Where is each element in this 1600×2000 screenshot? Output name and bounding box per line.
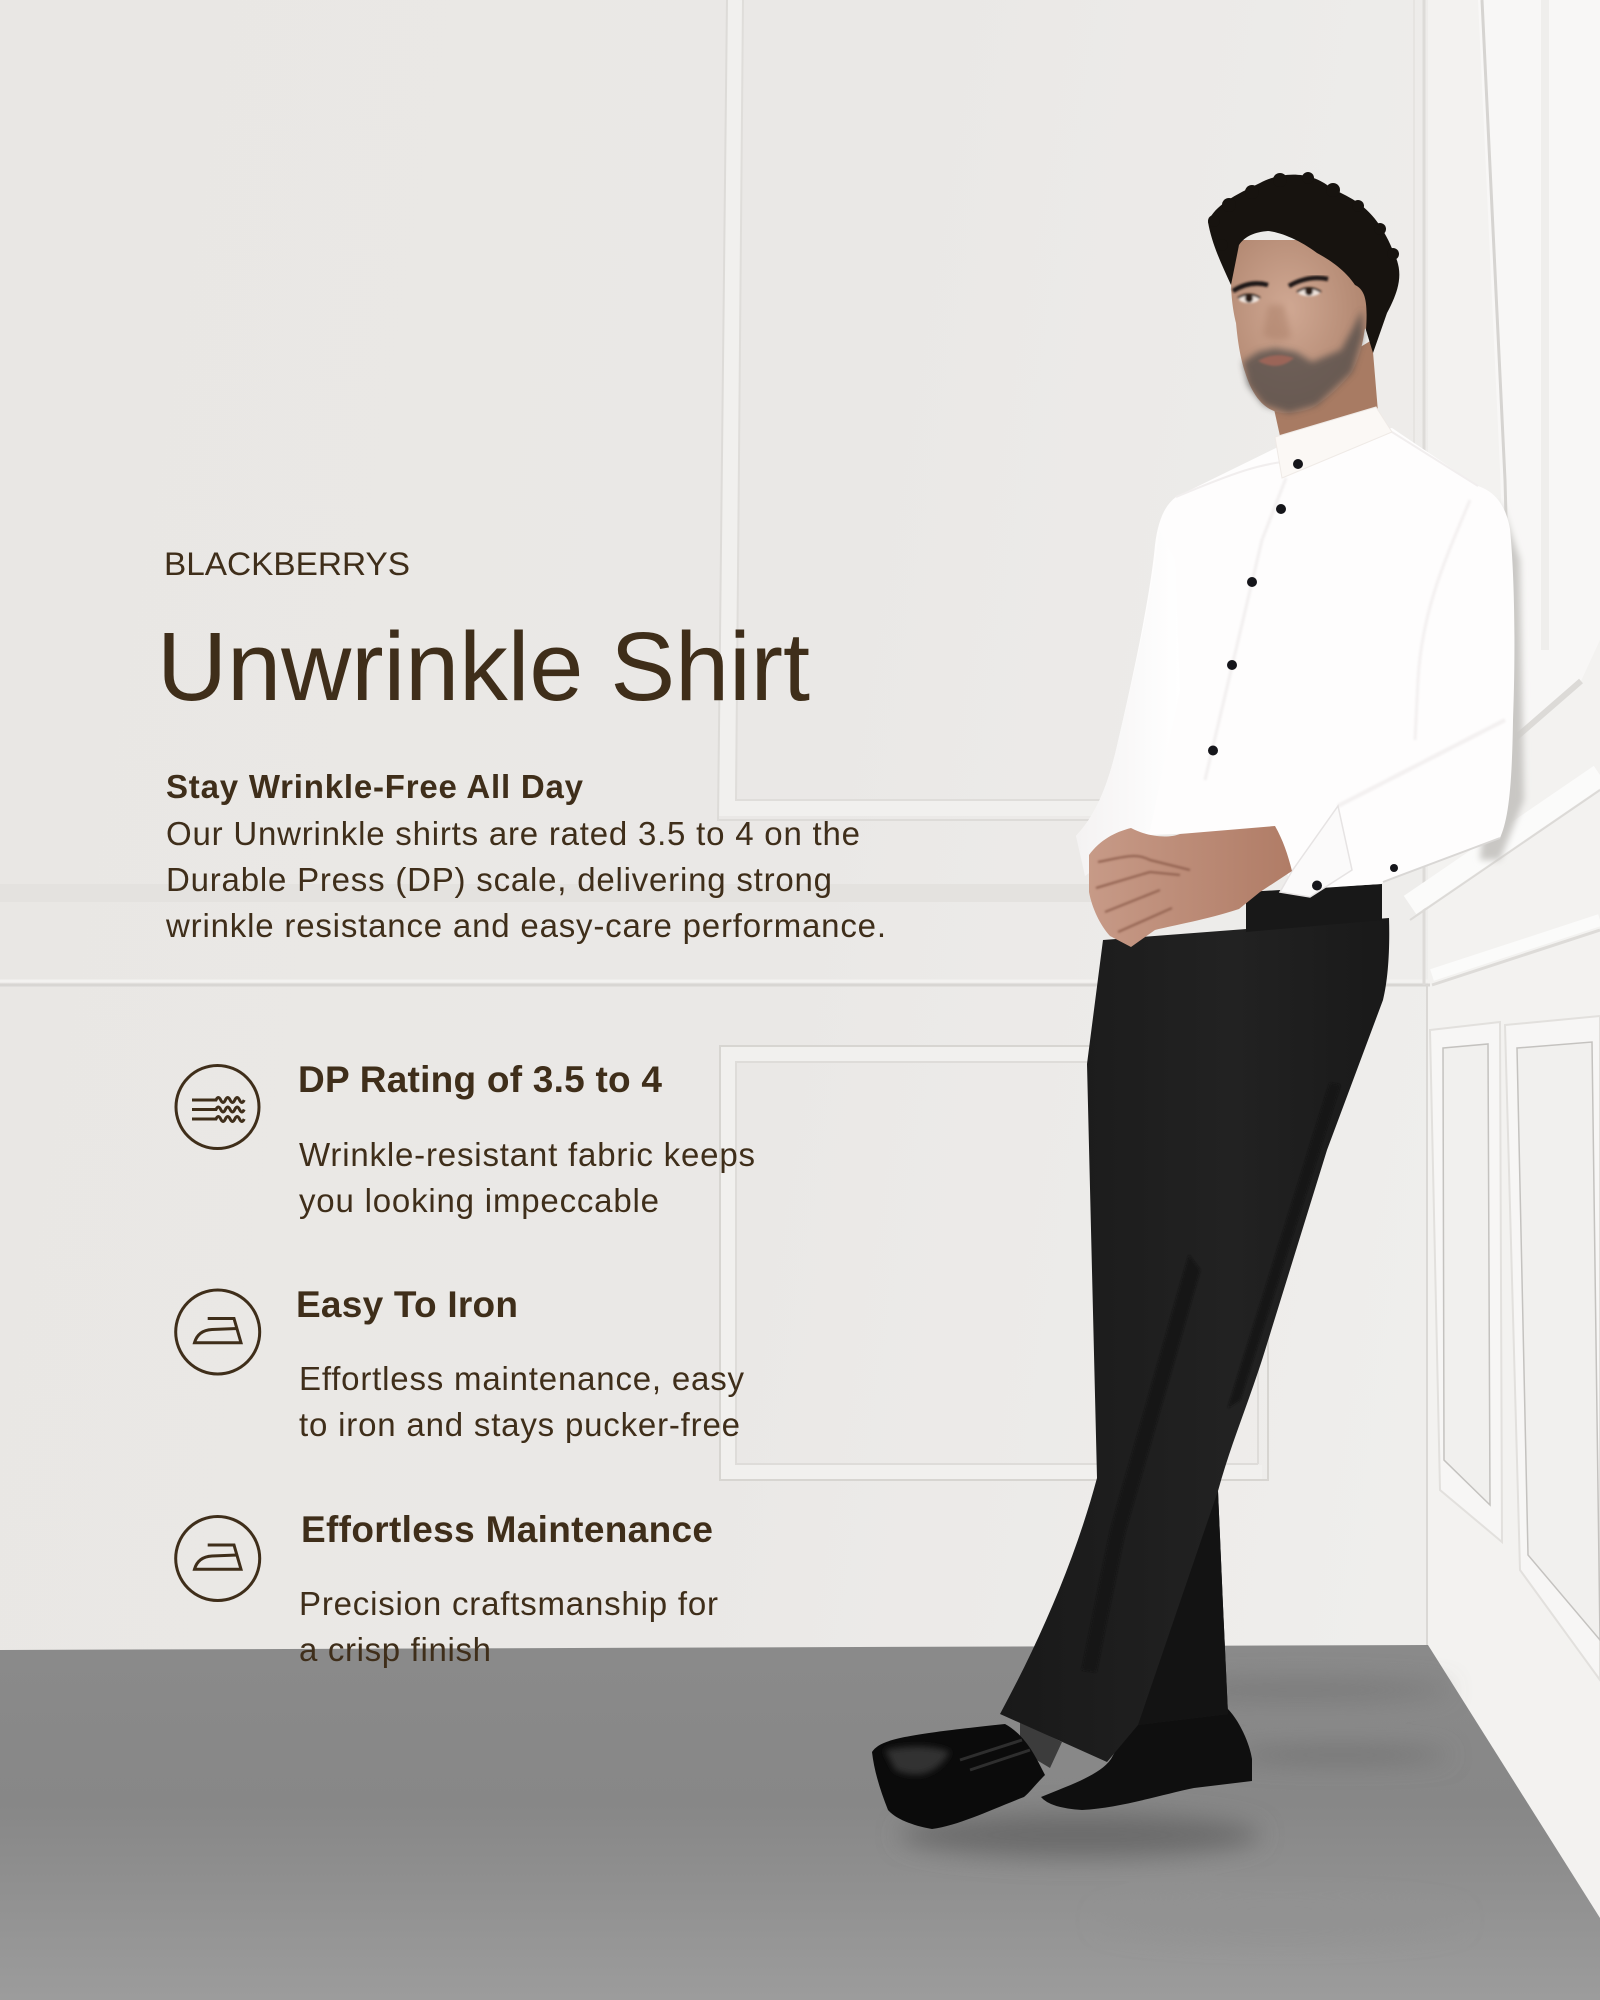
description: Wrinkle-resistant fabric keeps (299, 1136, 755, 1173)
ear (1360, 283, 1384, 333)
intro heading: Stay Wrinkle-Free All Day (166, 768, 584, 805)
description (299, 1360, 744, 1443)
nose (1263, 305, 1291, 341)
description (299, 1136, 755, 1219)
description: you looking impeccable (299, 1182, 659, 1219)
hair (1208, 172, 1399, 353)
description: to iron and stays pucker-free (299, 1406, 740, 1443)
description (299, 1585, 718, 1668)
feature: easy to iron (176, 1284, 744, 1443)
title: Unwrinkle Shirt (157, 612, 810, 721)
neck (1272, 340, 1378, 445)
brows (1233, 278, 1328, 291)
hands (1089, 826, 1292, 947)
person: man in white shirt and black trousers (872, 172, 1524, 1829)
trousers (1000, 918, 1389, 1762)
intro line 1: Our Unwrinkle shirts are rated 3.5 to 4 on the (166, 815, 860, 852)
icon: fabric waves in circle (176, 1066, 259, 1148)
face (1231, 240, 1367, 413)
wall shadow behind man (1480, 500, 1524, 860)
intro text block (165, 768, 886, 944)
shoe highlight (885, 1746, 950, 1775)
buttons (1208, 459, 1398, 890)
lips (1258, 355, 1294, 366)
collar (1275, 407, 1392, 478)
heading: DP Rating of 3.5 to 4 (298, 1059, 662, 1100)
cuff (1280, 806, 1352, 897)
icon: iron in circle (176, 1516, 260, 1600)
beard (1243, 310, 1363, 413)
description: Effortless maintenance, easy (299, 1360, 744, 1397)
brand name: BLACKBERRYS (164, 546, 410, 582)
left wall mouldings (0, 0, 1430, 1480)
shirt (1076, 407, 1514, 897)
feature: DP rating (176, 1059, 755, 1219)
back shoe (1041, 1706, 1252, 1810)
shoes (872, 1706, 1252, 1829)
heading: Easy To Iron (296, 1284, 518, 1325)
belt (1246, 884, 1382, 932)
description: Precision craftsmanship for (299, 1585, 718, 1622)
icon: iron in circle (176, 1290, 260, 1374)
description: a crisp finish (299, 1631, 491, 1668)
heading: Effortless Maintenance (301, 1509, 713, 1550)
front shoe (872, 1724, 1045, 1829)
feature: effortless maintenance (176, 1509, 718, 1668)
floor (0, 1645, 1600, 2000)
right wall mouldings (1410, 0, 1600, 1680)
eyes (1238, 288, 1321, 303)
laces (960, 1740, 1030, 1770)
intro line 3: wrinkle resistance and easy-care performance. (165, 907, 886, 944)
floor shadows (900, 1681, 1460, 1938)
intro line 2: Durable Press (DP) scale, delivering strong (166, 861, 832, 898)
sock (1020, 1722, 1062, 1768)
